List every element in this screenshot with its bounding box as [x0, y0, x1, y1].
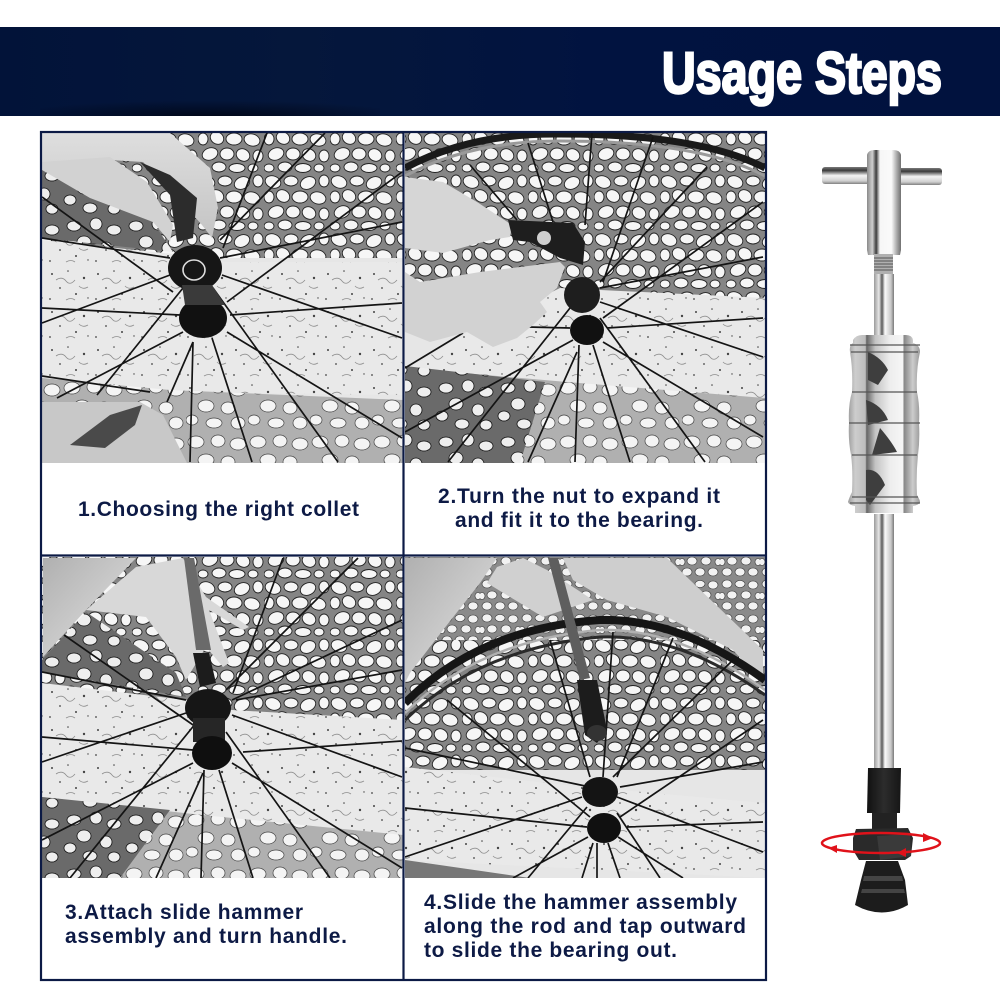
photo: step 4 tapping out the bearing — [405, 557, 765, 878]
caption: step 2: 2.Turn the nut to expand it — [438, 485, 720, 508]
caption: step 4: to slide the bearing out. — [424, 939, 677, 962]
panel: step 3 — [42, 557, 403, 948]
arm — [43, 558, 136, 657]
panel: step 2 — [405, 133, 765, 532]
photo: step 2 tire, wrench and hands — [405, 133, 765, 463]
wrench — [140, 162, 197, 242]
photo: step 3 slide hammer on hub — [42, 557, 403, 878]
threaded section — [874, 254, 893, 274]
right leg — [563, 558, 763, 683]
lower rod — [874, 514, 894, 770]
bottom hand — [42, 402, 187, 463]
handle cylinder — [867, 150, 901, 255]
black hex coupler — [867, 768, 901, 813]
left leg — [405, 558, 497, 683]
hand — [86, 558, 249, 680]
upper hand — [405, 177, 512, 253]
panel: step 4 — [405, 557, 765, 962]
rod — [184, 558, 211, 650]
caption: step 4: along the rod and tap outward — [424, 915, 746, 938]
lower hand — [405, 262, 565, 347]
rod — [548, 558, 590, 680]
caption: step 4: 4.Slide the hammer assembly — [424, 891, 737, 914]
tire — [405, 620, 765, 703]
top hand — [42, 133, 218, 238]
T-handle bars — [822, 167, 942, 185]
grid frame — [41, 132, 766, 980]
rotation arrow — [822, 833, 940, 857]
caption: step 2 — [438, 485, 720, 532]
panel: step 1 — [42, 133, 403, 521]
wrench — [508, 220, 585, 265]
bracket — [487, 558, 593, 617]
title: Usage Steps — [662, 41, 942, 106]
black thread — [872, 813, 897, 829]
black collet — [855, 861, 908, 912]
caption: step 1: 1.Choosing the right collet — [78, 498, 359, 521]
upper rod — [874, 274, 894, 336]
caption: step 3: assembly and turn handle. — [65, 925, 347, 948]
icon: slide hammer tool — [822, 150, 942, 912]
header banner — [0, 27, 1000, 116]
photo: step 1 wheel hub and hands — [42, 133, 403, 463]
slide hammer weight — [848, 335, 920, 513]
black nut — [853, 828, 913, 860]
caption: step 4 — [424, 891, 746, 962]
caption: step 3 — [65, 901, 347, 948]
caption: step 3: 3.Attach slide hammer — [65, 901, 303, 924]
caption: step 2: and fit it to the bearing. — [455, 509, 703, 532]
